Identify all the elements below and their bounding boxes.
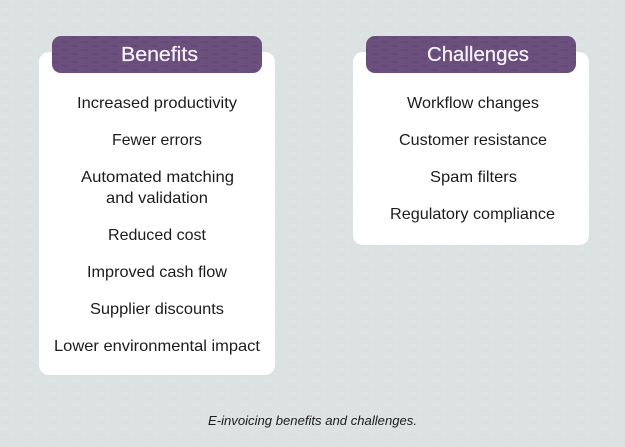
benefits list: and validation <box>106 190 208 207</box>
benefits list: Fewer errors <box>112 132 202 149</box>
challenges list: Workflow changes <box>407 95 539 112</box>
benefits list: Automated matching <box>81 169 234 186</box>
benefits list: Supplier discounts <box>90 301 224 318</box>
caption: E-invoicing benefits and challenges. <box>208 414 417 428</box>
benefits card <box>39 52 275 375</box>
panel: challenges <box>353 36 589 245</box>
panel: benefits <box>39 36 275 375</box>
challenges list: Spam filters <box>430 169 517 186</box>
benefits list: Lower environmental impact <box>54 338 261 355</box>
benefits heading: Benefits <box>121 43 198 66</box>
benefits heading <box>52 36 262 73</box>
benefits list: Increased productivity <box>77 95 237 112</box>
challenges heading <box>366 36 576 73</box>
benefits list: Improved cash flow <box>87 264 227 281</box>
challenges list <box>390 95 555 223</box>
challenges card <box>353 52 589 245</box>
benefits list <box>54 95 261 355</box>
challenges list: Regulatory compliance <box>390 206 555 223</box>
benefits list: Reduced cost <box>108 227 207 244</box>
challenges heading: Challenges <box>427 43 529 66</box>
challenges list: Customer resistance <box>399 132 547 149</box>
